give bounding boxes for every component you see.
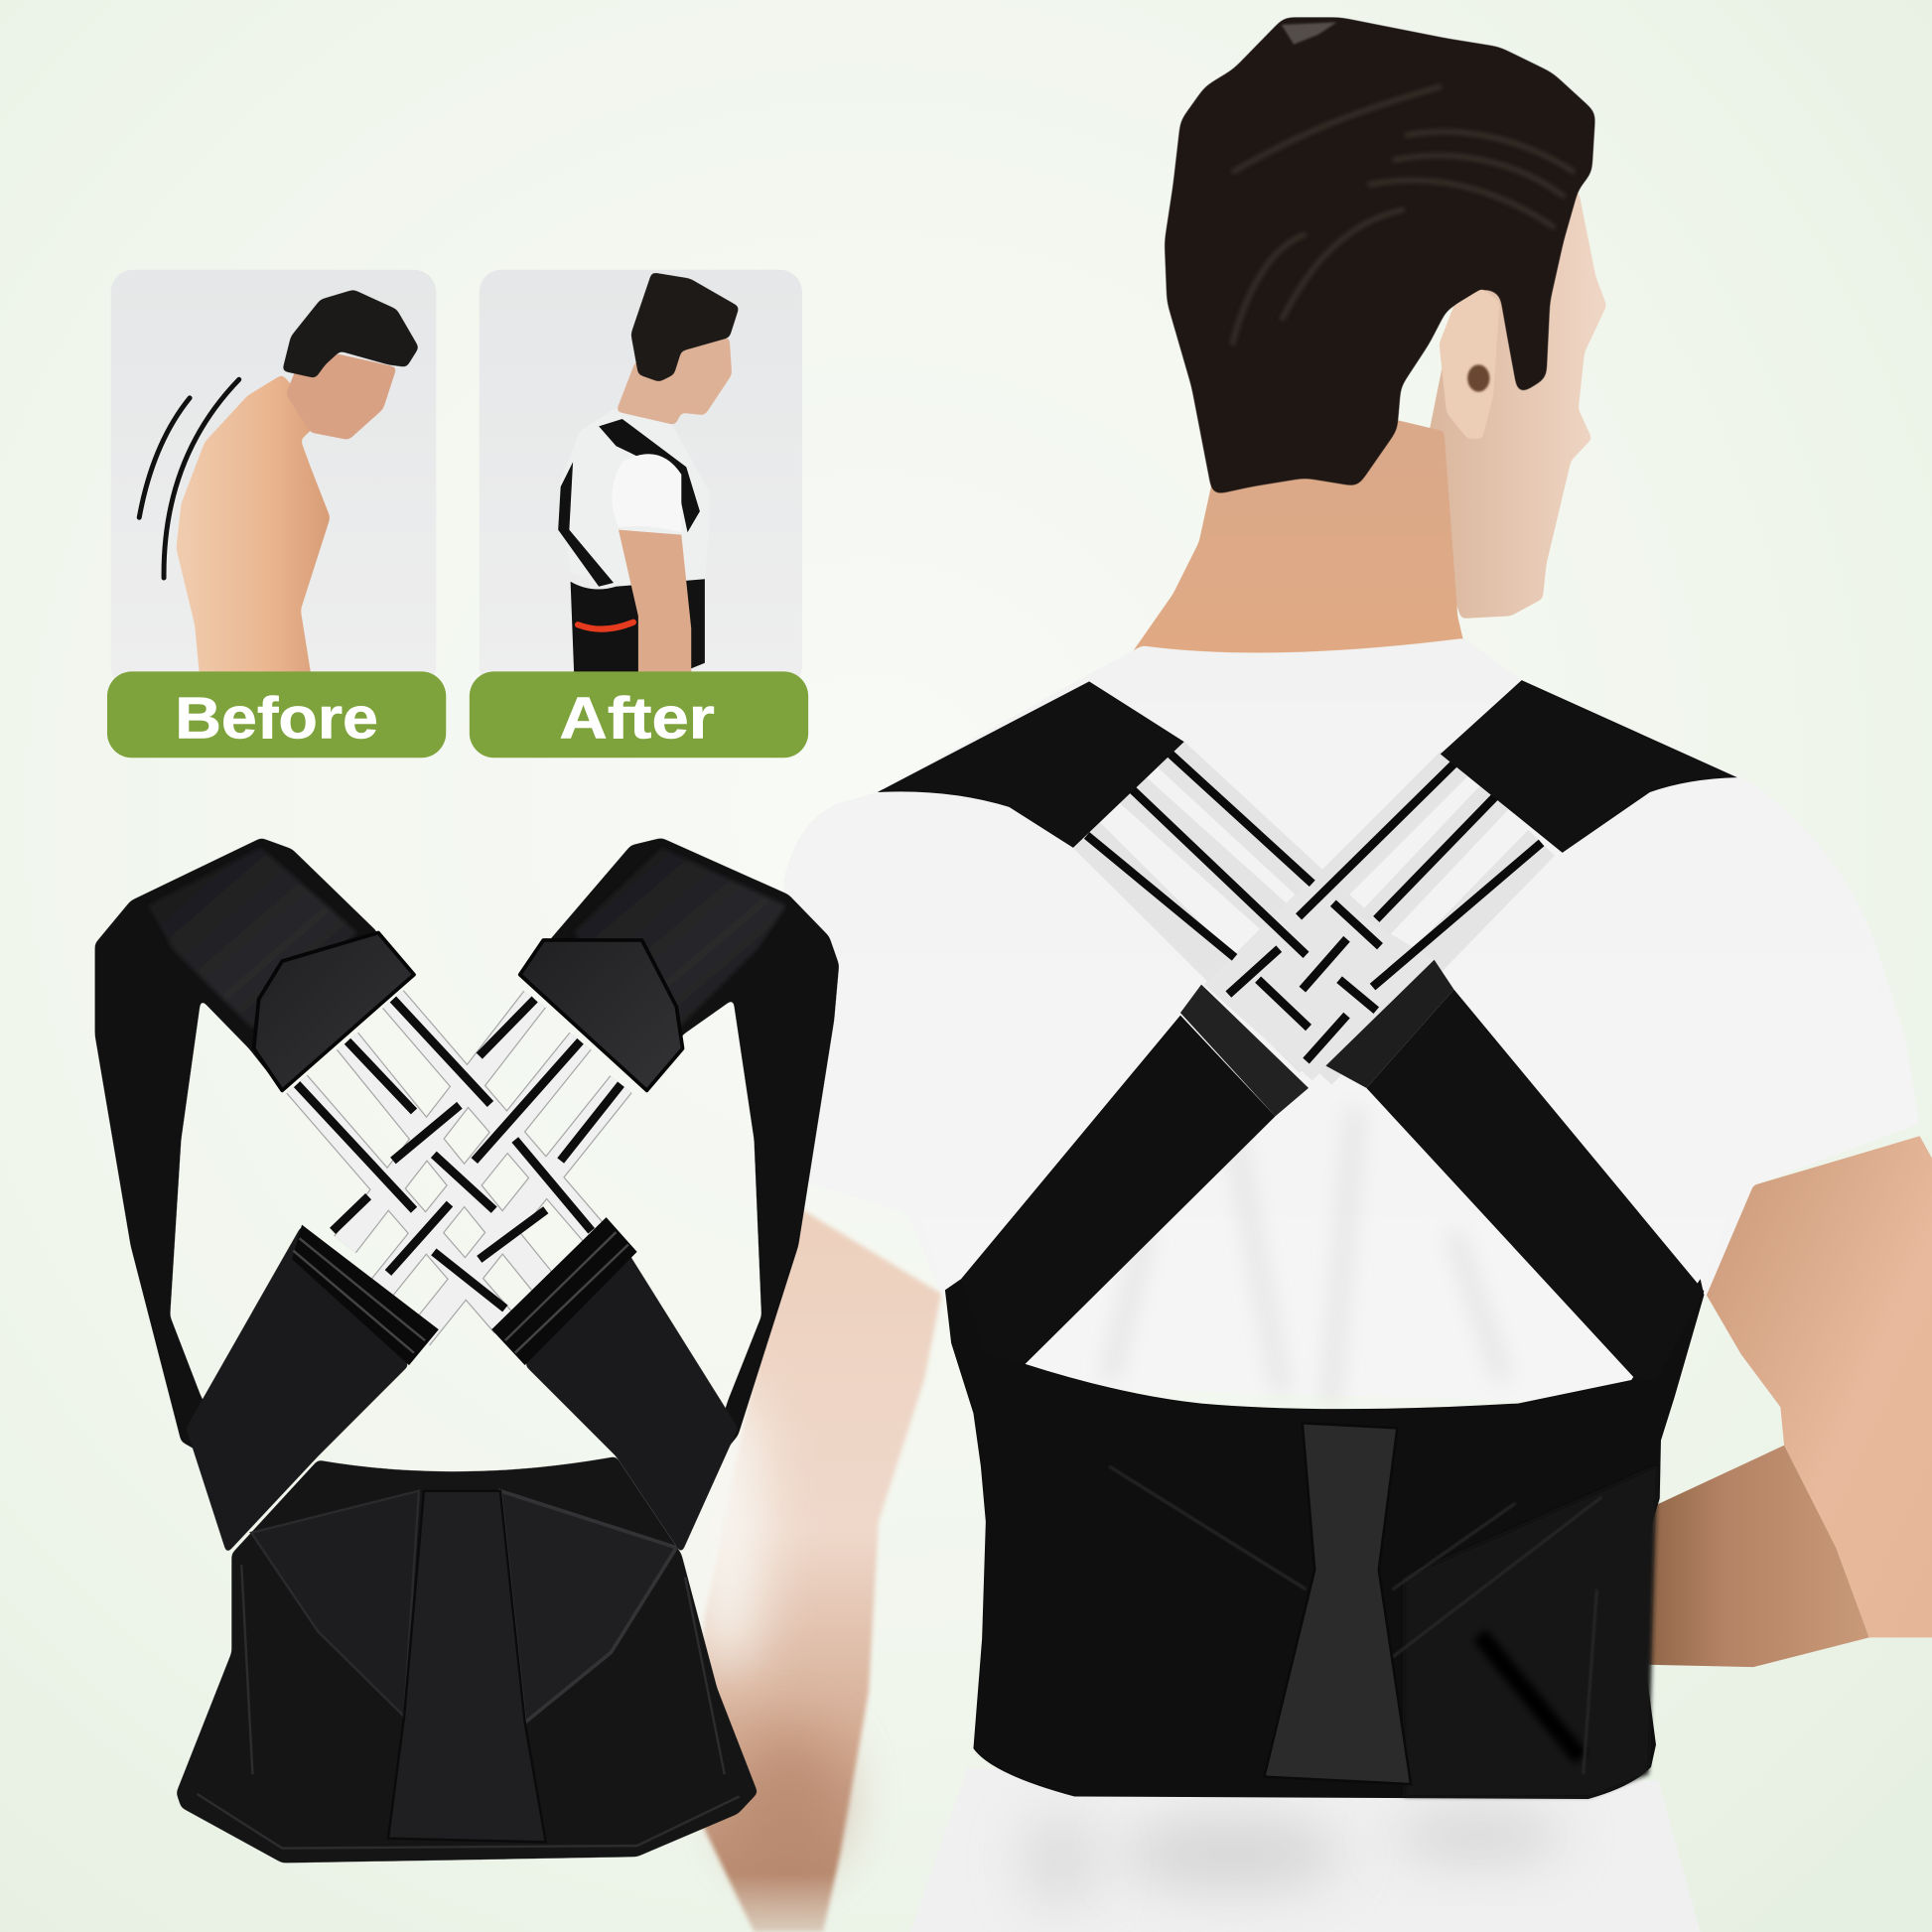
waist belt: [571, 579, 705, 678]
right lower strap: [1366, 990, 1704, 1380]
man crossing bands: [1087, 755, 1542, 1080]
right shoulder plate: [520, 940, 683, 1090]
red waist line: [578, 622, 633, 629]
outer shoulder straps: [95, 838, 839, 1478]
right upper arm: [1707, 1136, 1932, 1637]
white t-shirt: [783, 638, 1920, 1405]
after figure: [558, 272, 740, 690]
waist belt panel: [176, 1456, 758, 1863]
after hair: [630, 272, 740, 382]
posture curve marks: [139, 379, 239, 578]
before photo panel: [111, 270, 436, 702]
after neck and face: [617, 338, 732, 425]
left lower strap: [186, 1225, 409, 1554]
shirt folds: [1109, 1109, 1503, 1405]
left lower strap: [961, 1016, 1276, 1364]
neck and face: [1128, 190, 1606, 665]
before hair: [282, 290, 419, 378]
before figure: slouching torso: [176, 290, 419, 702]
center spine panel: [388, 1491, 546, 1842]
lower white garment: [910, 1768, 1701, 1932]
left arm: [690, 1201, 941, 1932]
center spine panel: [1264, 1423, 1411, 1784]
after photo panel: [480, 270, 802, 690]
right mesh panel: [500, 1491, 676, 1723]
man right shoulder pad: [1441, 680, 1737, 853]
hair: [1165, 17, 1595, 495]
right lower strap: [525, 1217, 738, 1554]
man left shoulder pad: [878, 681, 1184, 848]
man wearing posture corrector: [690, 17, 1932, 1932]
left shoulder plate: [254, 932, 414, 1090]
after label pill: After: [559, 684, 715, 751]
bottom seam: [198, 1565, 740, 1849]
man strap buckles: [1180, 960, 1453, 1116]
before label pill: Before: [175, 684, 378, 751]
metal woven bands: [297, 1000, 621, 1337]
right forearm: [1645, 1446, 1869, 1667]
right ribbed clamp: [491, 1217, 637, 1365]
after label pill: [470, 671, 808, 758]
harness: [558, 419, 700, 587]
left ribbed clamp: [292, 1225, 439, 1365]
back support panel: [945, 1279, 1704, 1799]
before face: [286, 351, 397, 440]
ear: [1440, 288, 1499, 439]
after sleeve: [612, 454, 681, 532]
before label pill: [107, 671, 446, 758]
product: posture corrector brace: [95, 838, 839, 1863]
after arm: [619, 530, 691, 690]
left mesh panel: [251, 1491, 419, 1717]
